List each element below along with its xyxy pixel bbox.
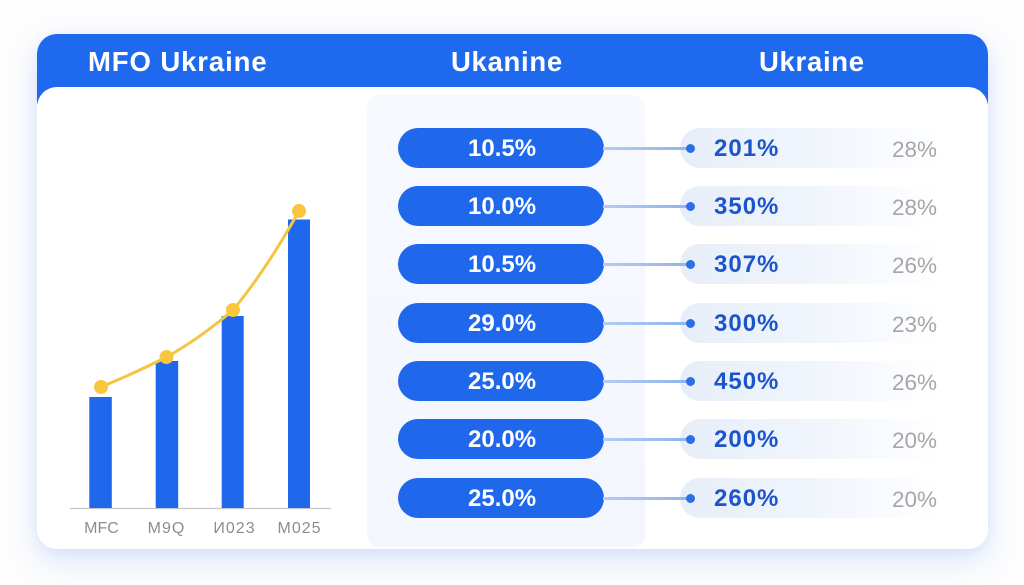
row 2: [398, 186, 937, 226]
axis labels: M9Q: [148, 520, 185, 537]
row 1: 10.5%: [468, 135, 536, 162]
row 5: 25.0%: [468, 368, 536, 395]
axis labels: [84, 520, 322, 537]
axis labels: И023: [213, 520, 256, 537]
row 2: 350%: [714, 193, 779, 220]
panel: centre column background: [367, 95, 645, 547]
axis labels: MFC: [84, 520, 119, 537]
row 1: 28%: [892, 137, 937, 162]
row 7: 20%: [892, 487, 937, 512]
trend line: [101, 211, 299, 387]
heading: Ukraine: Ukraine: [759, 46, 865, 77]
row 3: 26%: [892, 253, 937, 278]
heading: Ukanine: Ukanine: [451, 46, 563, 77]
row 1: [398, 128, 937, 168]
trend markers: [94, 204, 306, 394]
heading: MFO Ukraine: MFO Ukraine: [88, 46, 268, 77]
header band: [37, 34, 988, 104]
row 5: [398, 361, 937, 401]
row 3: [398, 244, 937, 284]
row 7: 25.0%: [468, 485, 536, 512]
bars: [89, 220, 310, 508]
row 6: 20.0%: [468, 426, 536, 453]
row 5: 450%: [714, 368, 779, 395]
row 2: 28%: [892, 195, 937, 220]
row 7: 260%: [714, 485, 779, 512]
bar chart with trend line: [70, 204, 331, 537]
row 3: 10.5%: [468, 251, 536, 278]
row 4: 29.0%: [468, 310, 536, 337]
row 1: 201%: [714, 135, 779, 162]
axis line: [70, 508, 331, 510]
row 6: [398, 419, 937, 459]
row 4: [398, 303, 937, 343]
row 7: [398, 478, 937, 518]
row 6: 20%: [892, 428, 937, 453]
row 6: 200%: [714, 426, 779, 453]
row 2: 10.0%: [468, 193, 536, 220]
row 5: 26%: [892, 370, 937, 395]
row 3: 307%: [714, 251, 779, 278]
panel: card body: [37, 87, 988, 549]
row 4: 300%: [714, 310, 779, 337]
row 4: 23%: [892, 312, 937, 337]
axis labels: M025: [277, 520, 322, 537]
